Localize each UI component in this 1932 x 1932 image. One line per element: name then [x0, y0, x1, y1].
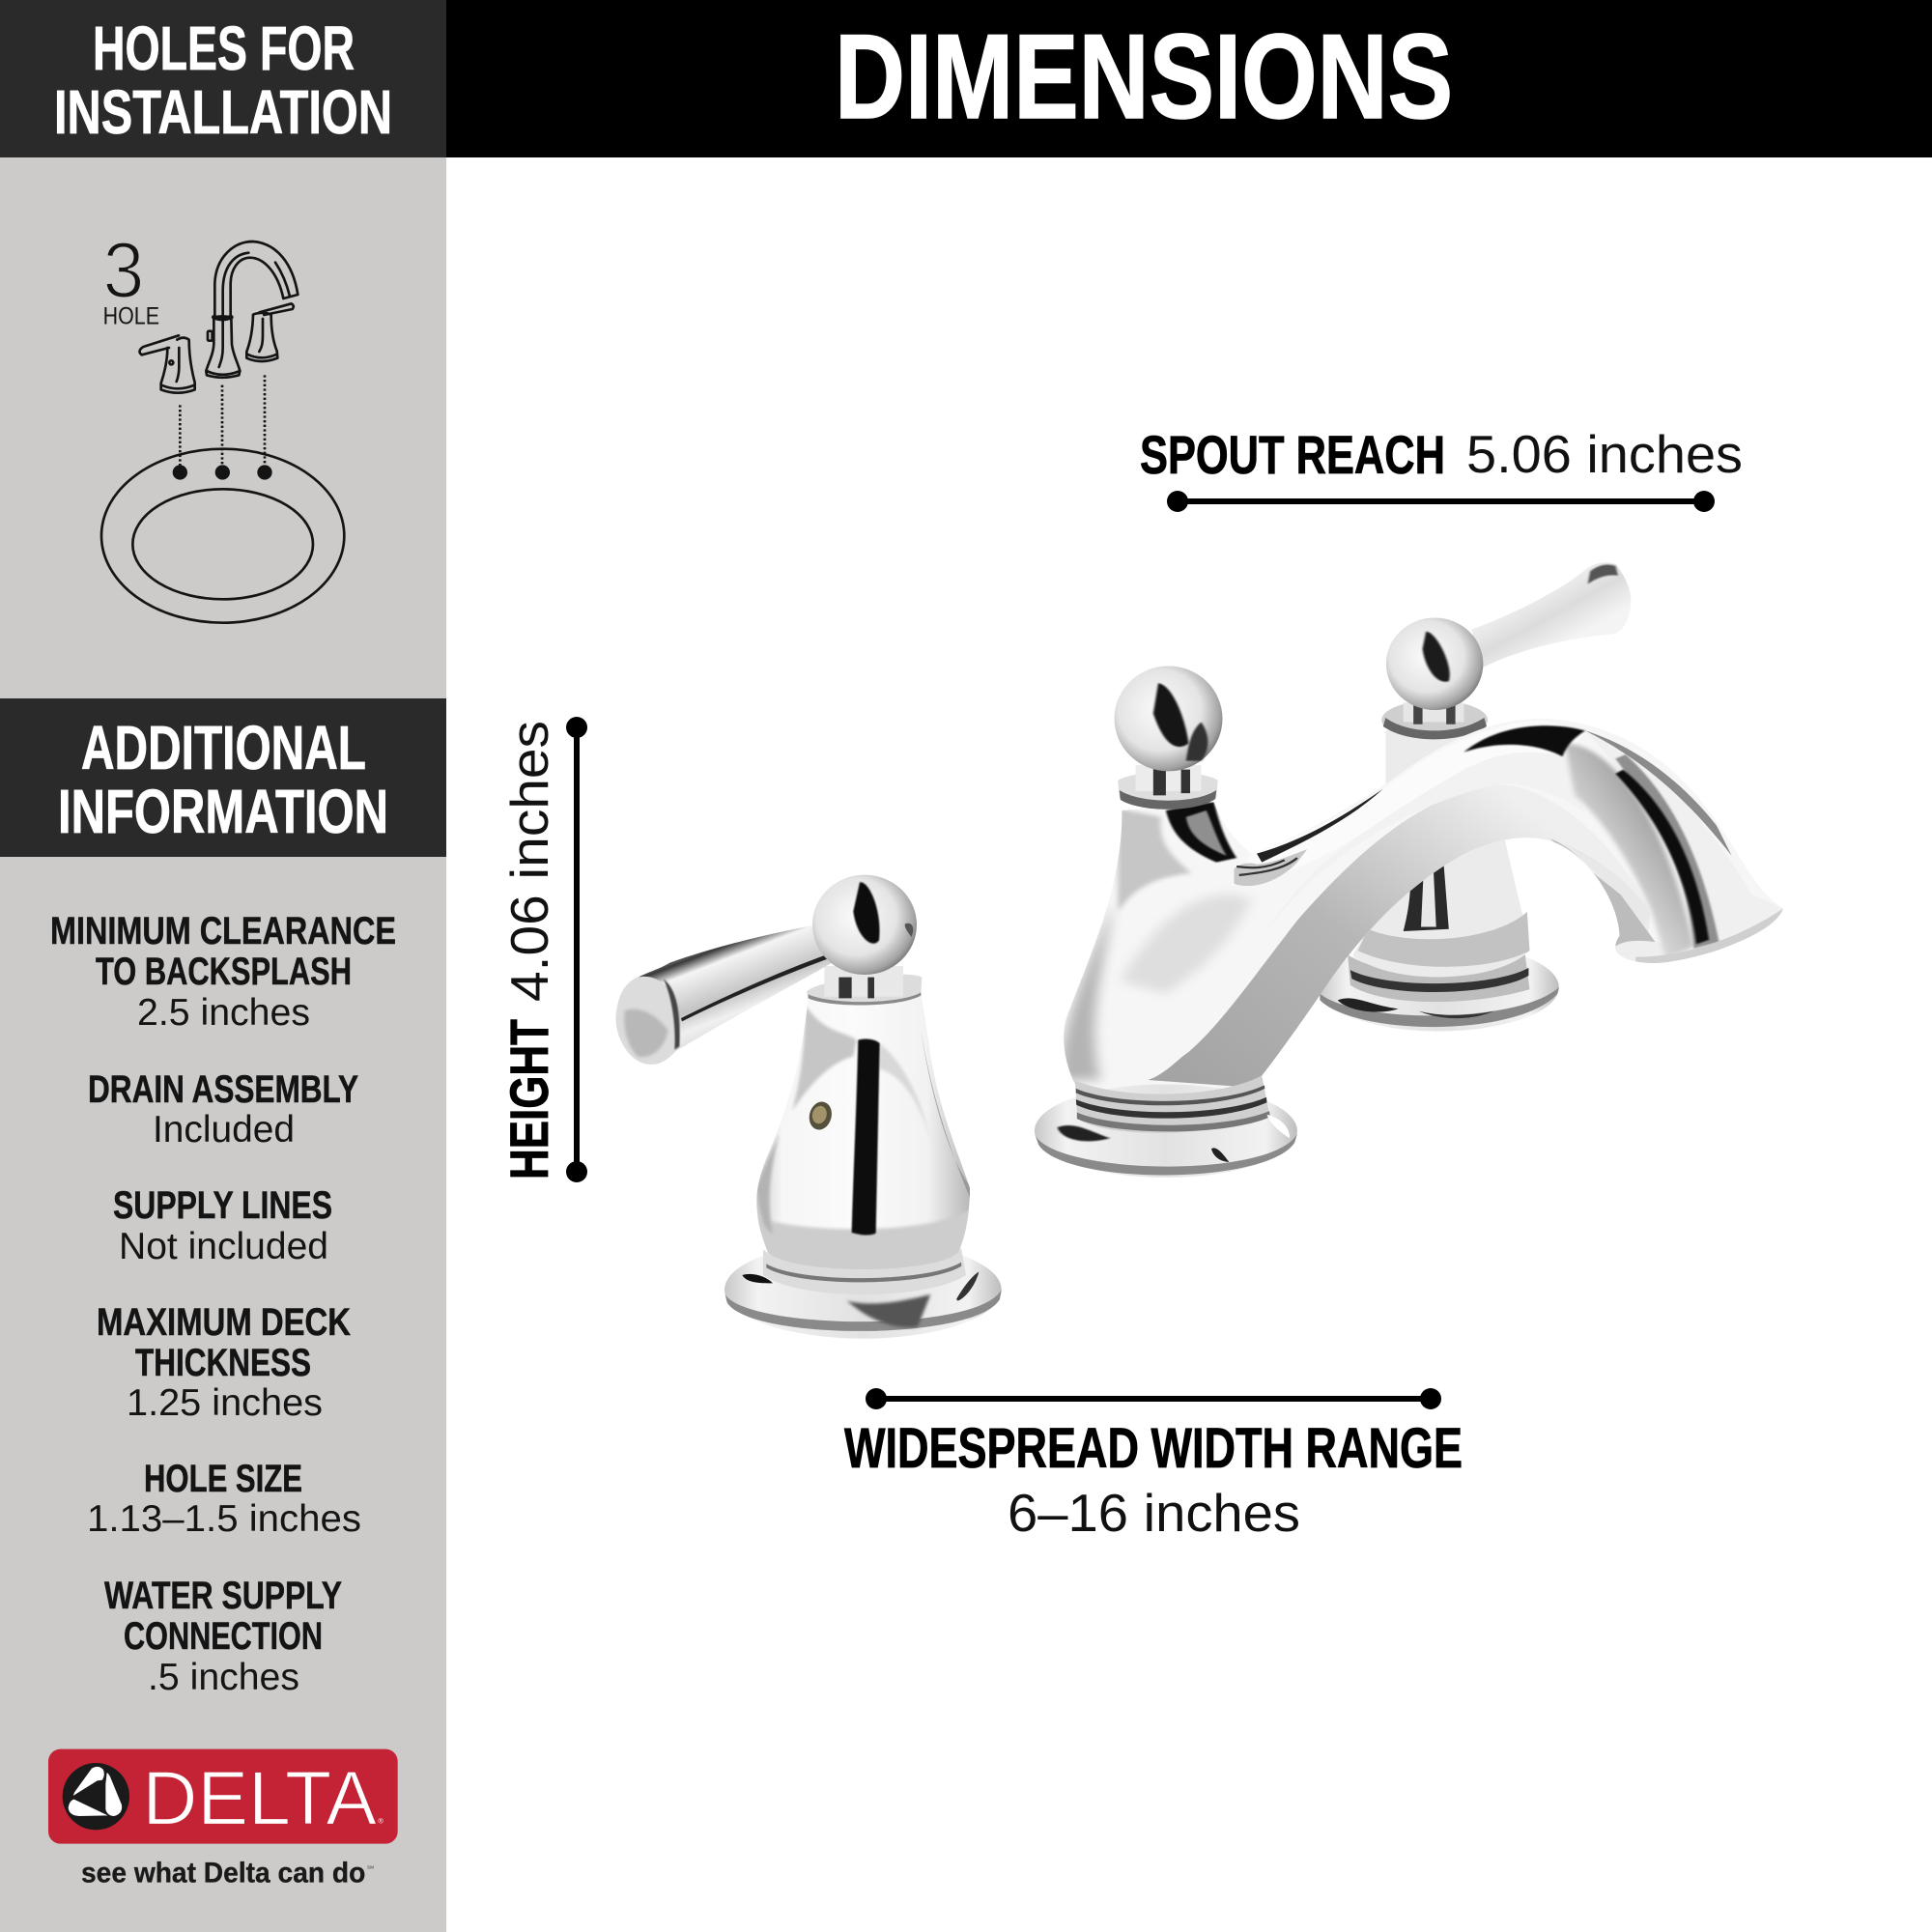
icon: three hole faucet and sink diagram	[101, 227, 344, 623]
text block: drain assembly	[88, 1068, 358, 1151]
label: spout reach: SPOUT REACH	[1140, 424, 1445, 485]
handle base	[724, 1240, 1002, 1339]
handle collar	[807, 966, 922, 1006]
text block: maximum deck thickness: 1.25 inches	[127, 1382, 323, 1424]
text block: drain assembly: Included	[153, 1109, 295, 1151]
label: spout reach: 5.06 inches	[1466, 424, 1743, 484]
text block: minimum clearance: TO BACKSPLASH	[96, 951, 352, 993]
arrow: widespread dimension line	[866, 1388, 1441, 1409]
text block: minimum clearance	[50, 910, 396, 1034]
rear handle	[1319, 562, 1631, 1032]
text block: minimum clearance: 2.5 inches	[137, 992, 310, 1034]
text block: water supply connection: .5 inches	[148, 1657, 299, 1698]
label: height: 4.06 inches	[499, 721, 559, 1002]
text block: maximum deck thickness	[97, 1301, 351, 1424]
arrow: height dimension line	[566, 717, 587, 1182]
label: spout reach	[1140, 424, 1743, 485]
image: front left faucet handle	[615, 875, 1002, 1339]
front spout base	[1035, 1076, 1297, 1178]
icon: three hole faucet and sink diagram: HOLE	[103, 303, 159, 330]
front spout body	[1060, 719, 1783, 1096]
text block: hole size: 1.13–1.5 inches	[87, 1498, 361, 1540]
panel: left sidebar	[0, 157, 446, 1932]
text block: water supply connection: WATER SUPPLY	[104, 1575, 342, 1617]
text block: maximum deck thickness: THICKNESS	[135, 1342, 311, 1384]
logo: delta: DELTA	[142, 1756, 378, 1841]
text block: hole size	[87, 1458, 361, 1540]
arrow: spout reach dimension line	[1167, 491, 1715, 512]
heading: additional information: INFORMATION	[58, 777, 388, 846]
heading: additional information: ADDITIONAL	[81, 713, 366, 782]
text block: supply lines: Not included	[119, 1226, 328, 1267]
text block: supply lines: SUPPLY LINES	[113, 1184, 332, 1227]
handle ball	[812, 875, 917, 975]
handle lever	[615, 923, 847, 1065]
image: faucet spout and rear handle	[1035, 562, 1783, 1178]
label: widespread width range: 6–16 inches	[1008, 1483, 1300, 1543]
text block: drain assembly: DRAIN ASSEMBLY	[88, 1068, 358, 1111]
icon: three hole faucet and sink diagram: 3	[103, 227, 144, 315]
text block: supply lines	[113, 1184, 332, 1267]
front handle	[1115, 666, 1222, 810]
heading: holes for installation: HOLES FOR	[93, 14, 355, 83]
text block: minimum clearance: MINIMUM CLEARANCE	[50, 910, 396, 952]
logo: delta: see what Delta can do	[81, 1857, 365, 1889]
logo: delta	[48, 1749, 398, 1889]
heading: additional information	[0, 698, 446, 857]
logo: delta: SM	[367, 1865, 374, 1870]
label: height	[498, 721, 559, 1179]
text block: water supply connection	[104, 1575, 342, 1698]
text block: maximum deck thickness: MAXIMUM DECK	[97, 1301, 351, 1344]
text block: hole size: HOLE SIZE	[144, 1458, 302, 1500]
label: widespread width range: WIDESPREAD WIDTH RANGE	[844, 1417, 1463, 1480]
label: height: HEIGHT	[498, 1019, 559, 1179]
heading: dimensions	[446, 0, 1932, 157]
logo: delta: ®	[378, 1816, 384, 1825]
text block: water supply connection: CONNECTION	[124, 1615, 323, 1658]
heading: holes for installation: INSTALLATION	[54, 77, 392, 147]
handle bell body	[753, 992, 973, 1275]
label: widespread width range	[844, 1417, 1463, 1543]
heading: holes for installation	[0, 0, 446, 157]
heading: dimensions: DIMENSIONS	[835, 11, 1453, 144]
